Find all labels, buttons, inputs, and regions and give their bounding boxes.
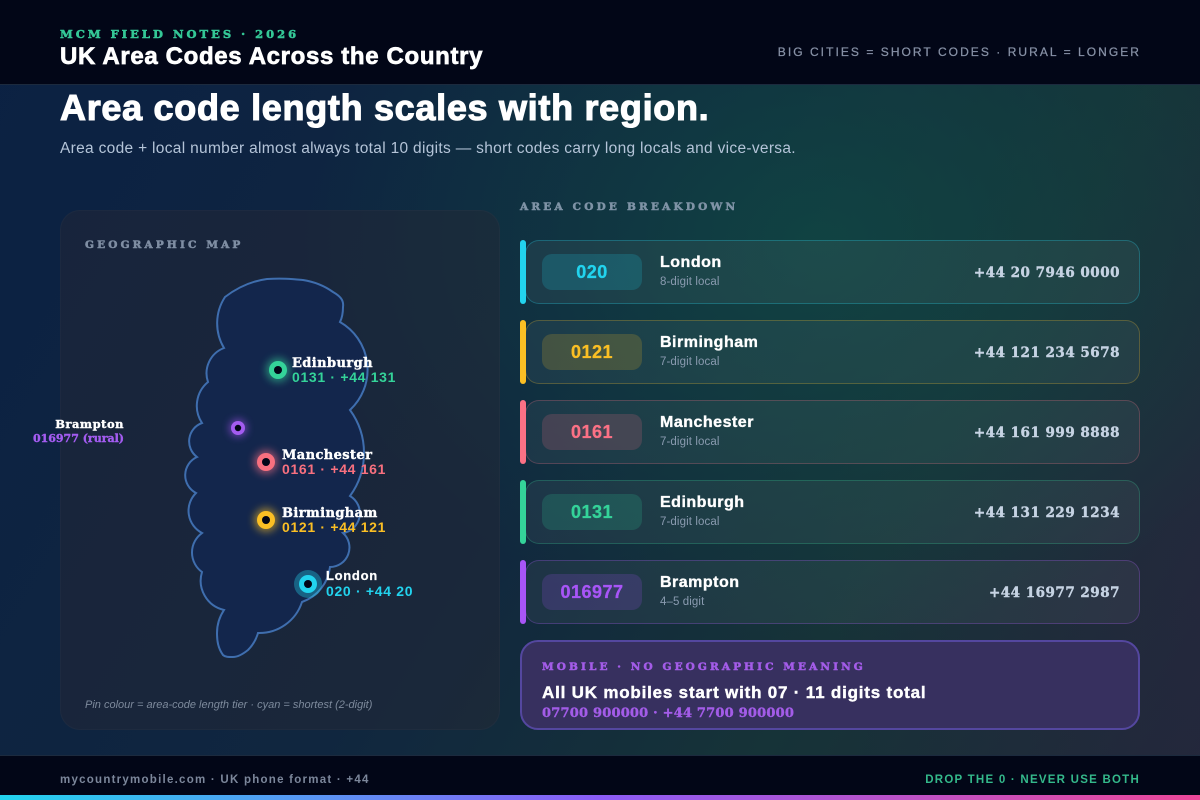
subheadline: Area code + local number almost always total 10 digits — short codes carry long locals and vice-versa. — [60, 140, 796, 157]
callout example numbers: 07700 900000 · +44 7700 900000 — [542, 706, 794, 721]
row: Brampton — [520, 560, 1140, 624]
label: Manchester: 0161 · +44 161 — [282, 461, 386, 477]
example number: +44 20 7946 0000 — [974, 265, 1120, 281]
pin: Birmingham — [254, 508, 278, 532]
header band — [0, 0, 1200, 85]
code badge — [542, 494, 642, 530]
code badge — [542, 414, 642, 450]
row: Edinburgh — [520, 480, 1140, 544]
callout: mobile — [520, 640, 1140, 730]
callout statement: All UK mobiles start with 07 · 11 digits total — [542, 683, 926, 702]
label: Edinburgh — [292, 356, 396, 385]
local digits: 8-digit local — [660, 276, 719, 288]
header tagline: BIG CITIES = SHORT CODES · RURAL = LONGER — [778, 45, 1141, 59]
label: Edinburgh: 0131 · +44 131 — [292, 369, 396, 385]
header title: UK Area Codes Across the Country — [60, 43, 483, 70]
pin: Manchester — [254, 450, 278, 474]
city: London — [660, 254, 722, 271]
city: Birmingham — [660, 334, 758, 351]
local digits: 7-digit local — [660, 436, 719, 448]
pin: London — [294, 570, 322, 598]
row: London — [520, 240, 1140, 304]
label: Birmingham — [282, 506, 386, 535]
island outline — [185, 279, 368, 657]
local digits: 7-digit local — [660, 516, 719, 528]
label: Birmingham: 0121 · +44 121 — [282, 519, 386, 535]
code badge: 0121 — [571, 342, 613, 362]
label: Manchester — [282, 448, 386, 477]
pin: Edinburgh — [266, 358, 290, 382]
footer band — [0, 755, 1200, 795]
code badge — [542, 334, 642, 370]
label: Brampton: 016977 (rural) — [33, 432, 124, 445]
local digits: 7-digit local — [660, 356, 719, 368]
breakdown heading: AREA CODE BREAKDOWN — [520, 201, 738, 213]
label: London: London — [326, 568, 378, 583]
eyebrow: MCM FIELD NOTES · 2026 — [60, 27, 299, 41]
gradient strip — [0, 795, 1200, 800]
label: Birmingham: Birmingham — [282, 506, 378, 521]
label: Brampton — [33, 417, 124, 445]
code badge: 020 — [576, 262, 608, 282]
city: Manchester — [660, 414, 754, 431]
row: Birmingham — [520, 320, 1140, 384]
example number: +44 161 999 8888 — [974, 425, 1120, 441]
label: Manchester: Manchester — [282, 448, 372, 463]
city: Brampton — [660, 574, 740, 591]
code badge: 016977 — [560, 582, 624, 602]
label: London — [326, 568, 413, 599]
example number: +44 121 234 5678 — [974, 345, 1120, 361]
callout eyebrow: MOBILE · NO GEOGRAPHIC MEANING — [542, 661, 866, 673]
label: Brampton: Brampton — [55, 417, 124, 431]
pin: Brampton — [229, 419, 247, 437]
code badge: 0131 — [571, 502, 613, 522]
local digits: 4–5 digit — [660, 596, 704, 608]
panel: geographic map — [60, 210, 500, 730]
row: Manchester — [520, 400, 1140, 464]
main headline: Area code length scales with region. — [60, 87, 709, 128]
label: London: 020 · +44 20 — [326, 583, 413, 599]
footer rule: DROP THE 0 · NEVER USE BOTH — [925, 774, 1140, 786]
map caption: Pin colour = area-code length tier · cyan = shortest (2-digit) — [85, 699, 372, 711]
city: Edinburgh — [660, 494, 744, 511]
code badge: 0161 — [571, 422, 613, 442]
label: Edinburgh: Edinburgh — [292, 356, 373, 371]
code badge — [542, 254, 642, 290]
code badge — [542, 574, 642, 610]
example number: +44 16977 2987 — [989, 585, 1120, 601]
map panel heading: GEOGRAPHIC MAP — [85, 239, 243, 251]
example number: +44 131 229 1234 — [974, 505, 1120, 521]
footer source: mycountrymobile.com · UK phone format · +44 — [60, 774, 370, 786]
